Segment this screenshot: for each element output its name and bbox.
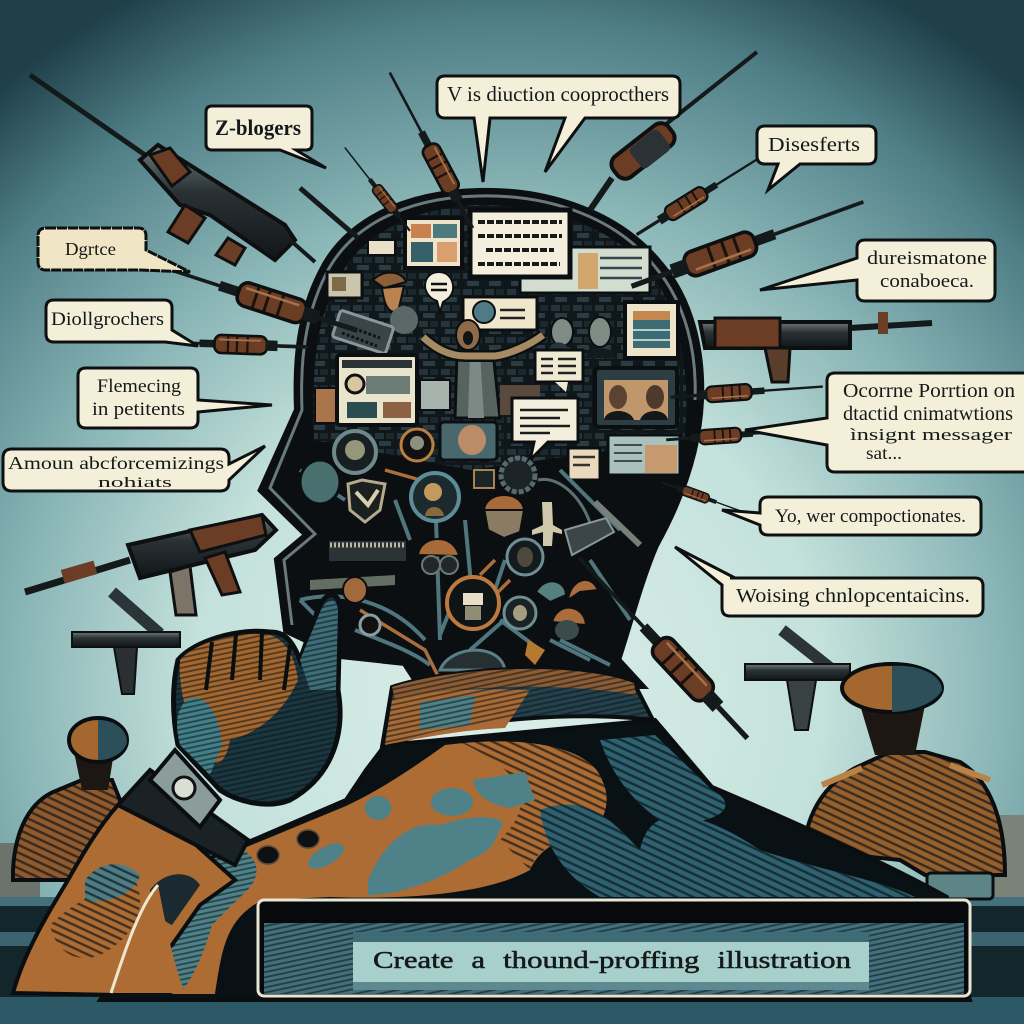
speech bubble: Woising: Woising chnlopcentaicìns. (736, 585, 970, 607)
speech bubble: Woising (675, 547, 983, 616)
head silhouette with collage (262, 192, 700, 685)
speech bubble: top (437, 76, 680, 182)
icon: rifle upper left (30, 75, 315, 265)
speech bubble: Flemecing: in petitents (92, 399, 185, 420)
speech bubble: Disesferts: Disesferts (768, 134, 860, 156)
speech bubble: right long: dtactid cnimatwtions (843, 403, 1013, 425)
speech bubble: Yo (722, 497, 981, 535)
icon: syringes around head (130, 52, 868, 747)
watch (118, 750, 248, 865)
speech bubble: Diollgrochers (46, 300, 198, 346)
banner: Create a thound-proffing illustration (373, 948, 851, 974)
speech bubble: Dgrtce (38, 228, 190, 272)
speech bubble: Dgrtce: Dgrtce (65, 239, 116, 259)
soldier right (803, 664, 1005, 899)
speech bubble: Yo: Yo, wer compoctionates. (775, 506, 966, 527)
soldier left (13, 718, 127, 880)
forearm (13, 805, 235, 995)
collage: lower network of portraits (300, 458, 640, 680)
uniform shoulder and collar (100, 669, 970, 1000)
hand (174, 595, 340, 804)
banner (258, 900, 970, 996)
speech bubble: Diollgrochers: Diollgrochers (51, 309, 164, 330)
icon: small gun left (72, 592, 180, 694)
speech bubble: right long: sat... (866, 443, 902, 463)
speech bubble: top: V is diuction cooprocthers (447, 82, 669, 106)
collage: upper screens (327, 210, 678, 358)
speech bubble: Disesferts (757, 126, 876, 190)
speech bubble: Amoun (3, 446, 265, 491)
icon: small gun right (745, 630, 850, 730)
desk (0, 815, 1024, 1024)
icon: rifle lower left (25, 515, 276, 615)
speech bubble: right long: ìnsignt messager (850, 425, 1012, 444)
speech bubble: Amoun: nohiats (98, 475, 172, 491)
speech bubble: right long: Ocorrne Porrtion on (843, 380, 1015, 402)
speech bubble: right long (745, 373, 1024, 472)
speech bubble: right upper: dureismatone (867, 248, 987, 269)
speech bubble: right upper: conaboeca. (880, 271, 974, 292)
speech bubble: Flemecing (78, 368, 272, 428)
speech bubble: right upper (760, 240, 995, 301)
speech bubble: Flemecing: Flemecing (97, 376, 182, 397)
speech bubble: Z-blogers: Z-blogers (215, 115, 301, 140)
collage: central figure (423, 317, 618, 418)
icon: rifle right (700, 312, 932, 382)
collage: middle screens (315, 355, 680, 480)
speech bubble: Z-blogers (206, 106, 326, 168)
speech bubble: Amoun: Amoun abcforcemizings (8, 453, 224, 473)
